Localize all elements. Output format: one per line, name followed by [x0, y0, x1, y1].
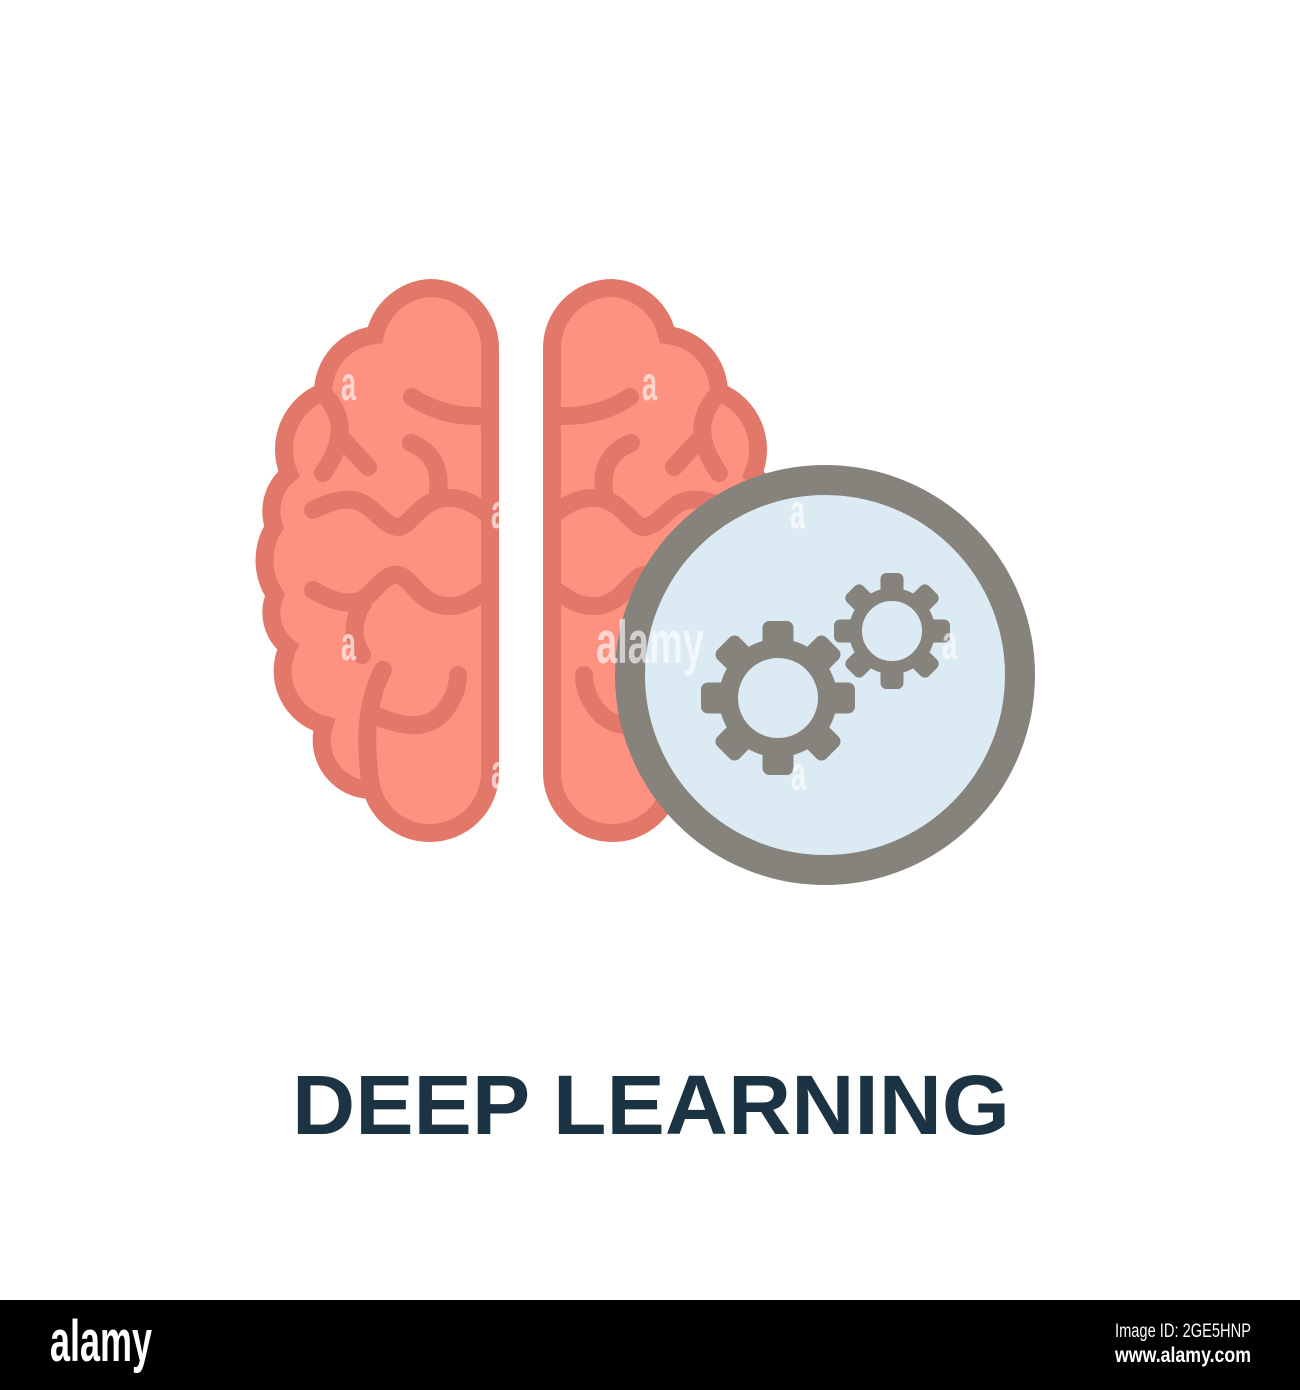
watermark text: a: [942, 617, 957, 670]
icon: right brain hemisphere: [552, 288, 777, 833]
watermark text: a: [491, 486, 506, 539]
website: www.alamy.com: [1114, 1344, 1251, 1367]
icon: small gear: [834, 573, 950, 689]
watermark text: a: [341, 618, 356, 671]
watermark text: [341, 358, 957, 801]
title: DEEP LEARNING: [292, 1058, 1010, 1152]
image id: Image ID: 2GE5HNP: [1115, 1321, 1251, 1342]
footer logo: alamy: [50, 1309, 152, 1374]
watermark text: a: [790, 486, 805, 539]
watermark text: a: [642, 358, 657, 411]
footer bar: [0, 1300, 1300, 1390]
icon: brain with gears: [265, 288, 1020, 870]
icon: left brain hemisphere: [265, 288, 490, 833]
icon: large gear: [701, 621, 855, 775]
watermark text: a: [341, 358, 356, 411]
watermark text: alamy: [596, 609, 704, 676]
icon: gear badge circle: [630, 480, 1020, 870]
watermark text: a: [491, 746, 506, 799]
watermark text: a: [791, 748, 806, 801]
